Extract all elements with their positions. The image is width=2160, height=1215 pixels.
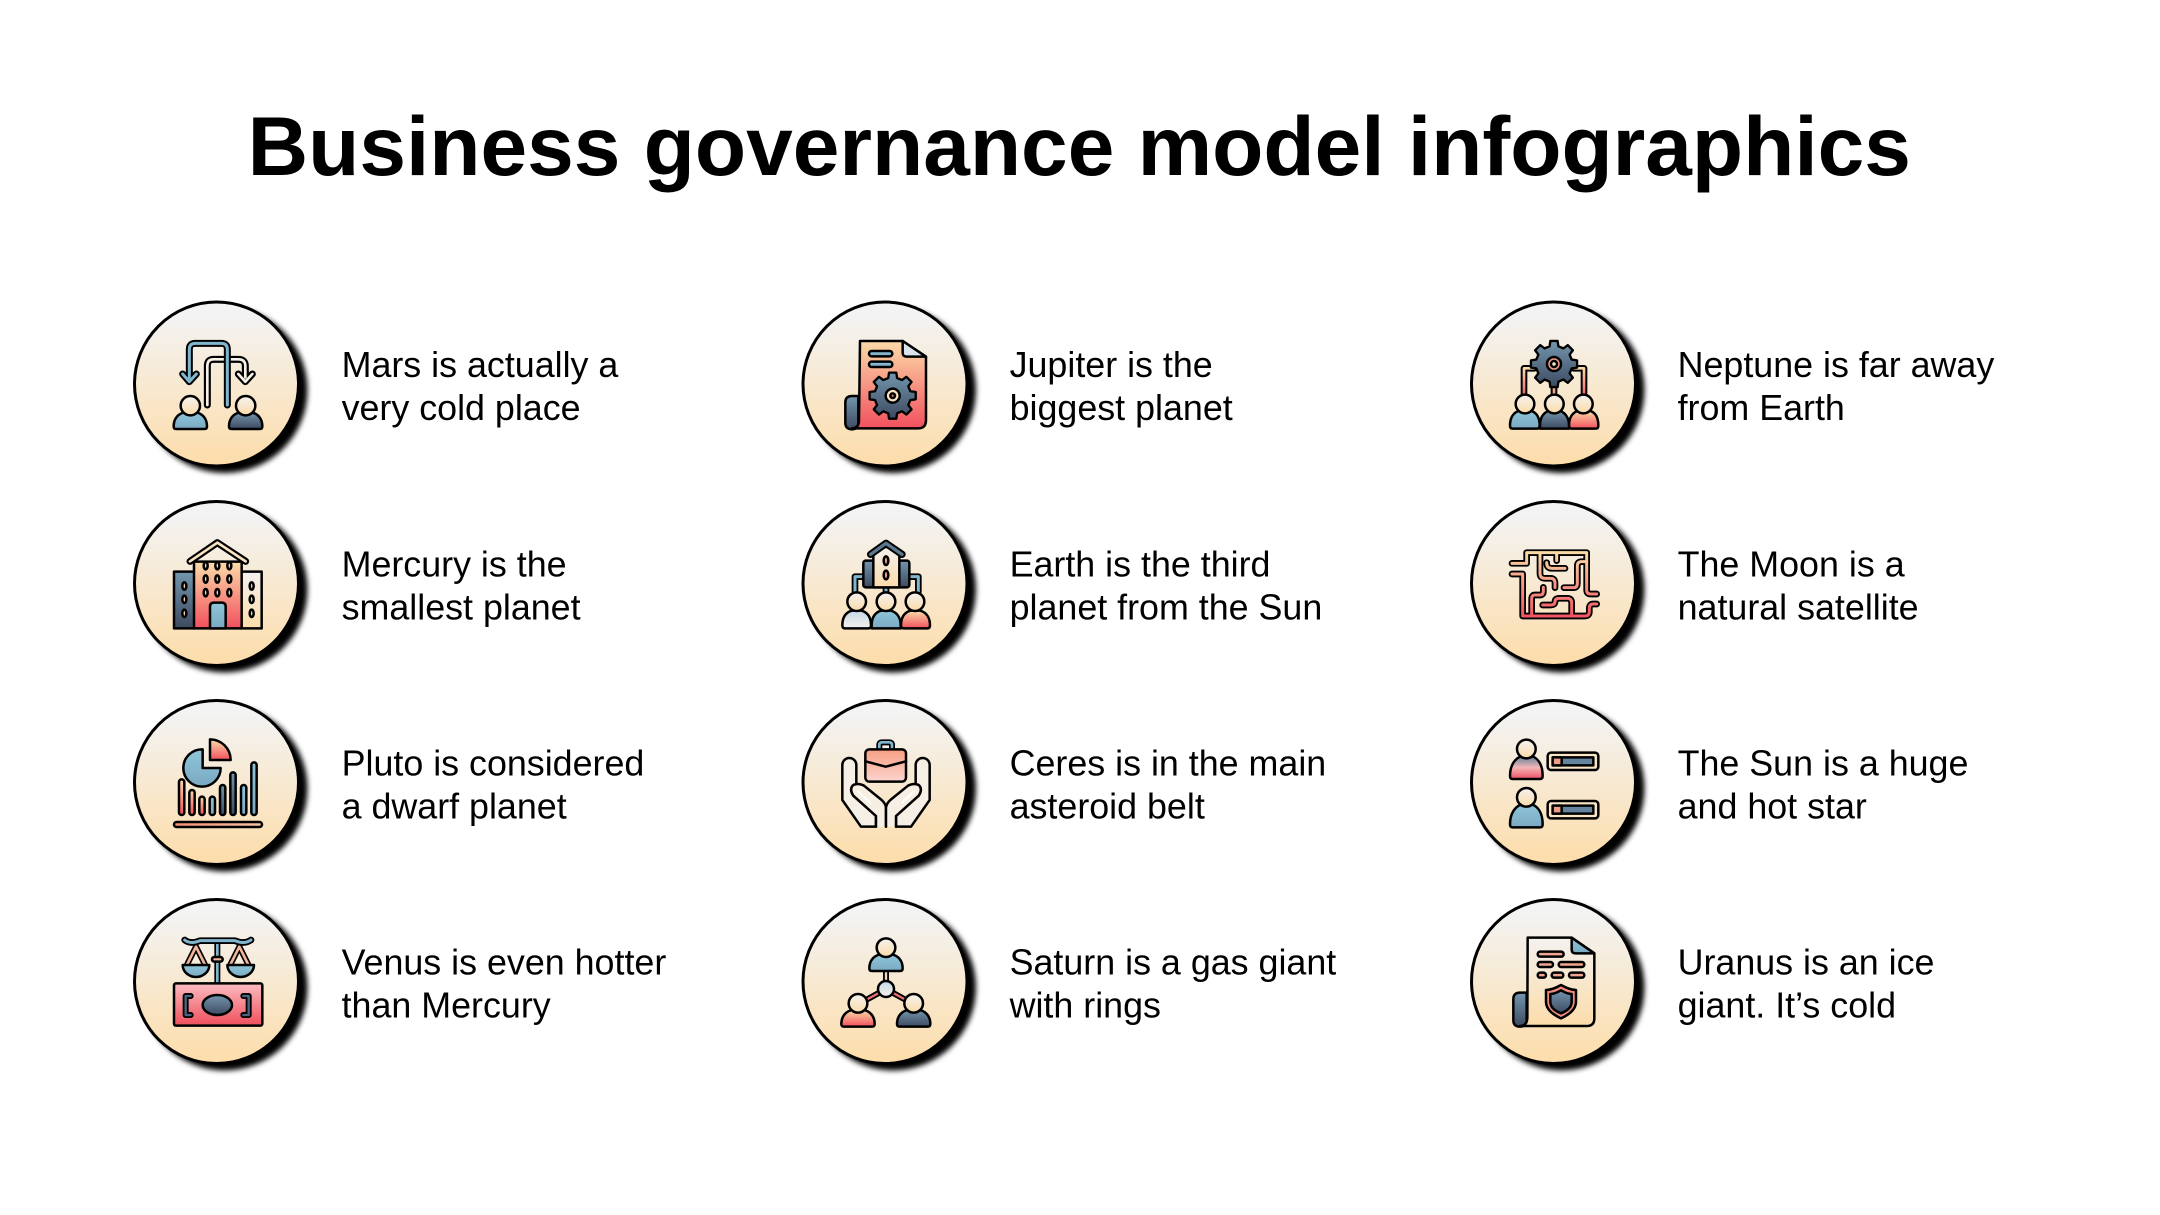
description: Uranus is an ice — [1678, 942, 1934, 982]
circle badge — [134, 900, 308, 1070]
circle badge — [134, 502, 308, 672]
item: Sun — [1472, 700, 1968, 872]
item: Pluto — [134, 700, 644, 872]
description: Neptune is far away — [1678, 345, 1994, 385]
description: and hot star — [1678, 786, 1867, 826]
circle badge — [803, 700, 976, 872]
icon: headquarters and people — [842, 543, 930, 628]
description: Jupiter is the — [1010, 345, 1213, 385]
icon: settings document — [845, 341, 926, 429]
item: Neptune — [1472, 302, 1994, 473]
description: planet from the Sun — [1010, 588, 1322, 628]
icon: hands holding briefcase — [842, 742, 930, 827]
item: Uranus — [1472, 900, 1934, 1070]
icon: people with rating bars — [1510, 740, 1598, 827]
item: Ceres — [803, 700, 1326, 872]
description: Venus is even hotter — [342, 942, 666, 982]
item: Saturn — [803, 900, 1336, 1070]
description: The Moon is a — [1678, 544, 1905, 584]
description: The Sun is a huge — [1678, 744, 1968, 784]
description: asteroid belt — [1010, 786, 1205, 826]
description: very cold place — [342, 388, 581, 428]
circle badge — [1472, 700, 1644, 872]
description: than Mercury — [342, 986, 551, 1026]
item: Jupiter — [803, 302, 1233, 473]
description: a dwarf planet — [342, 786, 567, 826]
description: Saturn is a gas giant — [1010, 942, 1336, 982]
icon: scales and money — [174, 940, 262, 1026]
icon: gear and team — [1510, 341, 1598, 429]
description: Mars is actually a — [342, 345, 618, 385]
description: smallest planet — [342, 588, 581, 628]
icon: office building — [174, 543, 262, 628]
circle badge — [1472, 302, 1644, 473]
description: Ceres is in the main — [1010, 744, 1326, 784]
description: biggest planet — [1010, 388, 1233, 428]
description: natural satellite — [1678, 588, 1919, 628]
circle badge — [1472, 900, 1644, 1070]
circle badge — [803, 302, 976, 473]
circle badge — [1472, 502, 1644, 672]
description: Mercury is the — [342, 544, 567, 584]
description: from Earth — [1678, 388, 1845, 428]
icon: secure document — [1513, 938, 1594, 1027]
item: Mars — [134, 302, 618, 473]
item: Venus — [134, 900, 666, 1070]
circle badge — [134, 302, 308, 473]
circle badge — [803, 502, 976, 672]
description: with rings — [1009, 986, 1161, 1026]
circle badge — [803, 900, 976, 1070]
icon: charts — [174, 739, 262, 827]
item: Moon — [1472, 502, 1919, 672]
icon: maze — [1512, 553, 1597, 616]
description: Pluto is considered — [342, 744, 644, 784]
item: Mercury — [134, 502, 581, 672]
icon: two people exchanging arrows — [174, 343, 262, 429]
item: Earth — [803, 502, 1322, 672]
circle badge — [134, 700, 308, 872]
description: Earth is the third — [1010, 544, 1270, 584]
icon: connected people — [841, 938, 930, 1027]
description: giant. It’s cold — [1678, 986, 1896, 1026]
title: Business governance model infographics — [248, 99, 1911, 193]
